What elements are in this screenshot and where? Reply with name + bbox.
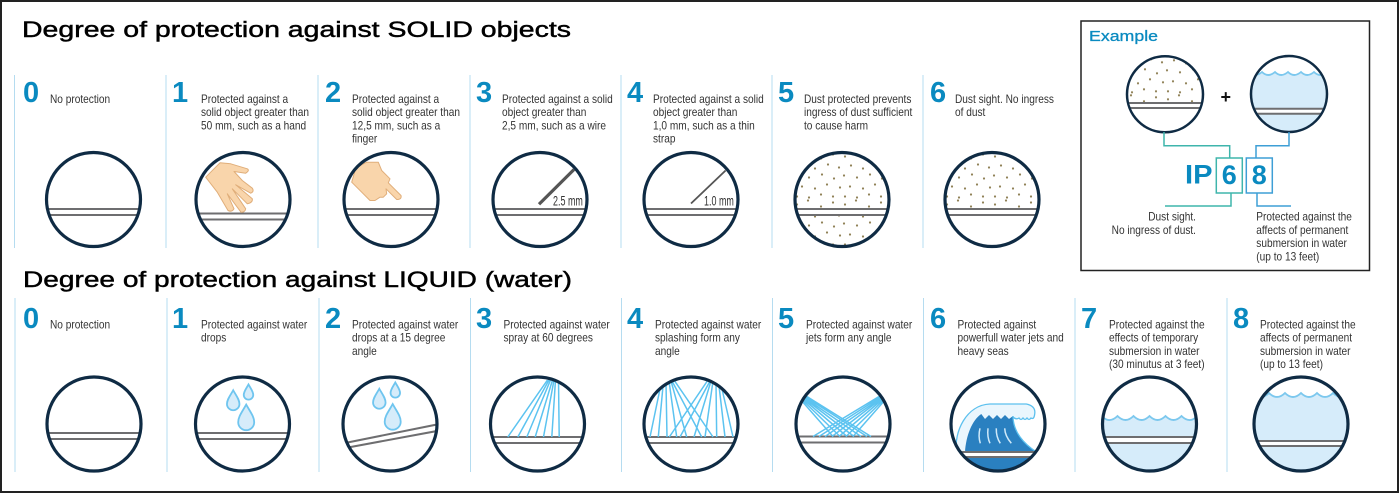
- text: solid 4: 1,0 mm, such as a thin: [653, 120, 755, 133]
- panel: solid 4: [621, 75, 764, 248]
- code box: 6: [1216, 158, 1242, 193]
- number: solid 2: 2: [325, 77, 341, 109]
- text: liquid 5: jets form any angle: [805, 332, 891, 345]
- panel: liquid 1: [167, 298, 308, 472]
- panel: liquid 7: [1075, 298, 1205, 472]
- icon: spray at 60 degrees: [490, 377, 586, 471]
- text: liquid 6: powerfull water jets and: [958, 332, 1064, 345]
- panel: solid 3: [470, 75, 613, 248]
- number: solid 1: 1: [172, 77, 188, 109]
- text: solid 4: strap: [653, 133, 675, 146]
- number: liquid 3: 3: [476, 303, 492, 335]
- icon: finger: [343, 152, 439, 246]
- code: IP: IP: [1185, 160, 1212, 190]
- text: liquid 7: Protected against the: [1109, 319, 1205, 332]
- text: liquid 8: submersion in water: [1260, 345, 1351, 358]
- icon: wave: [950, 377, 1046, 473]
- text: solid 5: ingress of dust sufficient: [804, 107, 912, 119]
- text: liquid 7: effects of temporary: [1109, 332, 1199, 345]
- number: solid 5: 5: [778, 77, 794, 109]
- text: liquid 5: Protected against water: [806, 319, 913, 332]
- panel: liquid 2: [319, 298, 459, 472]
- panel: solid 5: [772, 75, 912, 248]
- text: liquid 7: submersion in water: [1109, 345, 1200, 358]
- number: solid 0: 0: [23, 77, 39, 109]
- text: liquid 4: angle: [655, 345, 680, 358]
- text: liquid 8: (up to 13 feet): [1260, 359, 1323, 371]
- icon: jets from any angle: [795, 377, 891, 471]
- panel: liquid 5: [772, 298, 913, 472]
- panel: liquid 0: [15, 298, 142, 472]
- icon: splashing from any angle: [643, 377, 739, 471]
- number: liquid 7: 7: [1081, 303, 1097, 335]
- text: liquid 3: spray at 60 degrees: [504, 332, 593, 345]
- text: solid 3: 2,5 mm, such as a wire: [502, 120, 606, 133]
- text: solid 4: Protected against a solid: [653, 93, 764, 106]
- text: solid 2: finger: [352, 133, 378, 146]
- text: liquid 2: drops at a 15 degree: [352, 332, 445, 345]
- number: solid 6: 6: [930, 77, 946, 109]
- number: liquid 6: 6: [930, 303, 946, 335]
- text: liquid 2: Protected against water: [352, 319, 459, 332]
- text: example water: affects of permanent: [1256, 224, 1348, 237]
- icon: hand: [195, 152, 291, 246]
- text: example dust: Dust sight.: [1148, 211, 1196, 224]
- connector: dust to digit 6: [1164, 132, 1231, 206]
- text: example water: (up to 13 feet): [1256, 251, 1319, 263]
- panel: solid 0: [14, 75, 142, 248]
- icon: dust above surface: [944, 152, 1040, 246]
- text: solid 5: Dust protected prevents: [804, 93, 912, 106]
- number: liquid 8: 8: [1233, 303, 1249, 335]
- text: solid 1: Protected against a: [201, 93, 289, 106]
- label: 2.5 mm: 2.5 mm: [553, 194, 583, 209]
- icon: water circle: [1249, 56, 1329, 134]
- number: solid 3: 3: [476, 77, 492, 109]
- icon: bare surface: [46, 152, 142, 246]
- text: solid 1: 50 mm, such as a hand: [201, 120, 306, 133]
- connector: water to digit 8: [1256, 132, 1291, 206]
- text: example water: submersion in water: [1256, 238, 1347, 250]
- number: liquid 5: 5: [778, 303, 794, 335]
- panel: liquid 4: [622, 298, 762, 472]
- number: solid 4: 4: [627, 77, 643, 109]
- panel: liquid 6: [924, 298, 1064, 473]
- text: liquid 0: No protection: [50, 319, 110, 332]
- text: solid 3: object greater than: [502, 107, 586, 119]
- heading: example: Example: [1089, 28, 1158, 45]
- number: liquid 2: 2: [325, 303, 341, 335]
- number: liquid 1: 1: [172, 303, 188, 335]
- icon: wire 2.5 mm: [492, 152, 588, 246]
- code box: 6: 6: [1222, 160, 1237, 190]
- panel: solid 1: [166, 75, 309, 248]
- panel: liquid 3: [470, 298, 610, 472]
- text: solid 6: of dust: [955, 107, 985, 119]
- text: solid 0: No protection: [50, 93, 110, 106]
- text: liquid 1: drops: [201, 332, 227, 345]
- code box: 8: 8: [1252, 160, 1267, 190]
- icon: permanent submersion: [1253, 377, 1349, 472]
- text: liquid 7: (30 minutus at 3 feet): [1109, 359, 1205, 371]
- icon: bare surface: [46, 377, 142, 471]
- number: liquid 0: 0: [23, 303, 39, 335]
- text: liquid 4: Protected against water: [655, 319, 762, 332]
- text: solid 1: solid object greater than: [201, 107, 309, 119]
- icon: dust circle: [1125, 54, 1205, 132]
- icon: drops at an angle: [343, 377, 438, 471]
- icon: temporary submersion: [1102, 377, 1198, 472]
- text: liquid 6: heavy seas: [958, 345, 1009, 358]
- panel: solid 2: [318, 75, 460, 248]
- text: liquid 6: Protected against: [958, 319, 1036, 332]
- icon: water drops: [194, 377, 290, 471]
- text: solid 5: to cause harm: [804, 120, 868, 133]
- text: liquid 3: Protected against water: [504, 319, 610, 332]
- text: solid 2: 12,5 mm, such as a: [352, 120, 441, 133]
- panel: liquid 8: [1227, 298, 1356, 472]
- heading: solid objects: Degree of protection against SOLID objects: [22, 17, 571, 42]
- text: liquid 8: affects of permanent: [1260, 332, 1352, 345]
- text: example water: Protected against the: [1256, 211, 1352, 224]
- heading: liquid: Degree of protection against LIQUID (water): [23, 267, 572, 292]
- icon: strap 1.0 mm: [643, 152, 739, 246]
- text: example dust: No ingress of dust.: [1112, 224, 1196, 237]
- panel: solid 6: [923, 75, 1055, 248]
- text: liquid 4: splashing form any: [655, 332, 740, 345]
- text: solid 4: object greater than: [653, 107, 737, 119]
- text: solid 3: Protected against a solid: [502, 93, 613, 106]
- text: solid 2: solid object greater than: [352, 107, 460, 119]
- text: liquid 1: Protected against water: [201, 319, 308, 332]
- text: solid 2: Protected against a: [352, 93, 440, 106]
- panel: example: [1081, 21, 1370, 270]
- text: liquid 2: angle: [352, 345, 377, 358]
- code box: 8: [1246, 158, 1272, 193]
- plus sign: +: [1220, 87, 1231, 107]
- label: 1.0 mm: 1.0 mm: [704, 194, 734, 209]
- text: liquid 8: Protected against the: [1260, 319, 1356, 332]
- text: solid 6: Dust sight. No ingress: [955, 93, 1055, 106]
- icon: dust everywhere: [794, 152, 890, 248]
- number: liquid 4: 4: [627, 303, 643, 335]
